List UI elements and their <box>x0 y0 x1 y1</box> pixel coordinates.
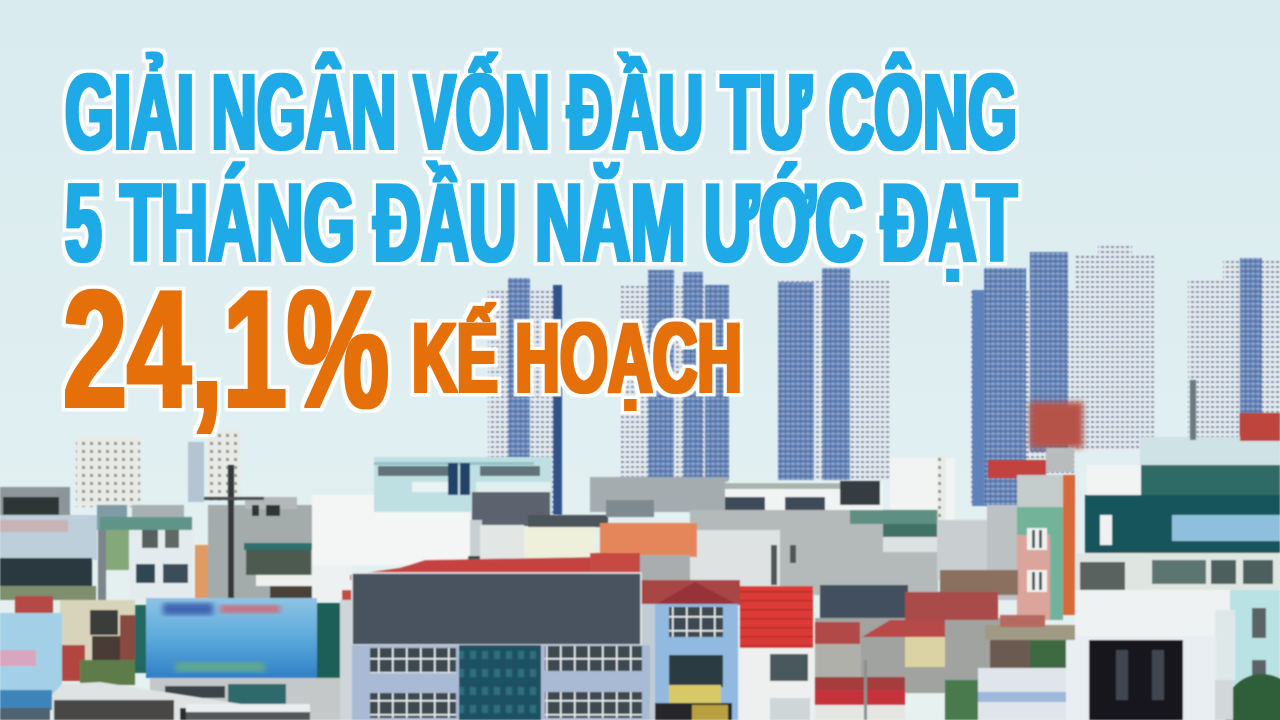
white block <box>312 495 470 565</box>
pink and teal building <box>940 402 1083 620</box>
building with dark rooftop sign <box>342 553 650 720</box>
low-left houses and billboard <box>0 596 135 720</box>
bus roof <box>52 682 310 720</box>
key figure 24,1%: 24,1% <box>63 255 389 443</box>
distant high-rise towers <box>76 245 1279 525</box>
right-centre grey buildings <box>590 477 987 595</box>
foreground city buildings <box>0 380 1280 720</box>
small houses <box>640 580 1075 720</box>
label KẾ HOẠCH: KẾ HOẠCH <box>412 302 742 413</box>
right teal block <box>1066 380 1280 720</box>
left upper buildings <box>0 465 470 601</box>
blurred FPT billboard <box>135 598 352 720</box>
mid buildings behind the dark sign <box>374 457 608 568</box>
